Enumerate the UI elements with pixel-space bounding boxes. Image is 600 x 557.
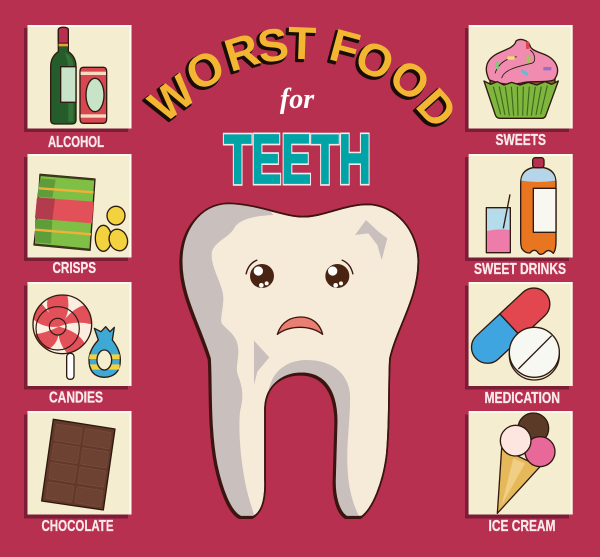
- tooth shadow outline: [180, 205, 417, 518]
- title: teeth: TEETH: [224, 120, 371, 198]
- subtitle: for: for: [280, 84, 315, 115]
- title: worst food: F: [325, 18, 365, 76]
- title: teeth: [224, 120, 371, 198]
- title: worst food: R: [219, 22, 265, 82]
- crack: lower left: [254, 341, 269, 385]
- title: worst food: F: [323, 20, 363, 78]
- title: worst food: T: [285, 19, 315, 71]
- illustration: sad tooth: [170, 195, 418, 518]
- panel: alcohol: [24, 25, 132, 132]
- title: worst food: O: [378, 50, 438, 114]
- sad mouth: [277, 317, 323, 334]
- title: worst food: S: [254, 17, 292, 73]
- label: medication: MEDICATION: [484, 390, 560, 407]
- icon: glass and soda bottle: [486, 158, 556, 254]
- title: worst food: W: [137, 66, 203, 134]
- title: worst food: D: [405, 80, 465, 140]
- label: chocolate: CHOCOLATE: [42, 518, 114, 535]
- panel: candies: [24, 282, 132, 390]
- label: sweet drinks: SWEET DRINKS: [474, 261, 566, 278]
- label: candies: CANDIES: [49, 390, 103, 406]
- panel: medication: [465, 281, 573, 390]
- title: worst food: O: [176, 41, 230, 103]
- tooth outline: [182, 203, 418, 517]
- icon: ice cream cone: [497, 413, 555, 513]
- label: sweets: SWEETS: [496, 132, 546, 149]
- left eye: [246, 260, 274, 288]
- title: worst food: O: [178, 39, 232, 101]
- title: worst food: W: [139, 64, 205, 132]
- title: worst food: T: [287, 17, 317, 69]
- icon: crisps bag and chips: [34, 174, 131, 253]
- panel: ice cream: [465, 411, 573, 518]
- label: crisps: CRISPS: [52, 260, 96, 277]
- icon: lollipop and wrapped candy: [33, 295, 120, 379]
- icon: wine bottle and can: [51, 27, 107, 124]
- icon: capsule and tablet: [465, 281, 559, 380]
- title: worst food: [137, 17, 467, 140]
- tooth body: [182, 203, 418, 517]
- crack: upper right: [355, 220, 387, 260]
- panel: sweets: [465, 25, 573, 132]
- label: ice cream: ICE CREAM: [488, 518, 556, 535]
- title: worst food: R: [217, 24, 263, 84]
- right eye: [325, 260, 353, 288]
- tooth shading: [182, 204, 359, 516]
- panel: chocolate: [24, 411, 132, 518]
- title: teeth: TEETH: [224, 120, 371, 198]
- icon: chocolate bar: [42, 419, 115, 510]
- title: worst food: O: [380, 48, 440, 112]
- title: worst food: S: [252, 19, 290, 75]
- icon: cupcake: [484, 39, 558, 118]
- title: worst food: D: [407, 78, 467, 138]
- panel: crisps: [24, 154, 132, 261]
- label: alcohol: ALCOHOL: [48, 134, 104, 151]
- title: worst food: O: [346, 31, 400, 93]
- panel: sweet drinks: [465, 154, 573, 261]
- title: worst food: O: [348, 29, 402, 91]
